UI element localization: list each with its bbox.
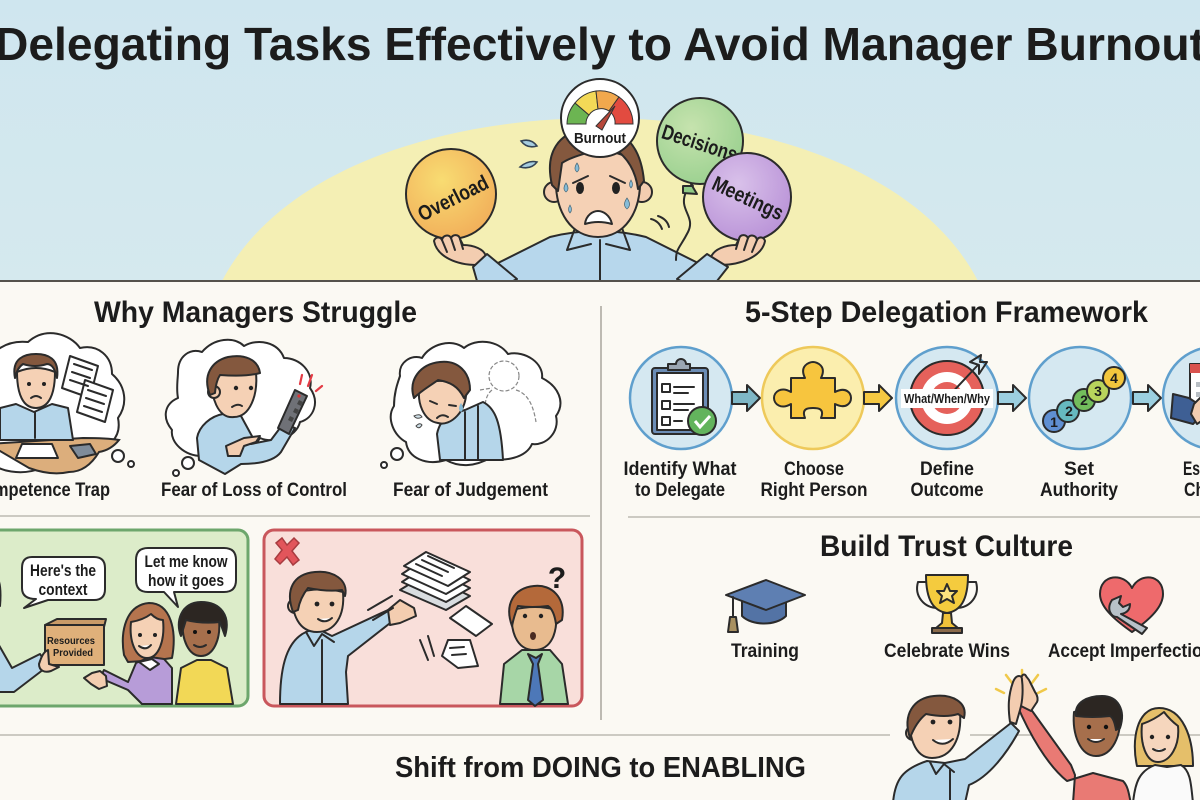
speech bubble: here's the context: [22, 557, 105, 608]
dumping manager: [280, 572, 416, 704]
icon: heart with wrench: [1100, 577, 1163, 634]
box: resources provided: Provided: [53, 647, 93, 659]
panel: good delegation example: [0, 530, 248, 706]
box: resources provided: Resources: [47, 635, 95, 647]
speech bubble: here's the context: Here's the: [30, 562, 96, 580]
icon: trophy: [917, 575, 977, 633]
question mark: ?: [548, 562, 566, 595]
burnout gauge: Burnout: [574, 130, 626, 147]
arrow: [732, 385, 760, 411]
step labels: Authority: [1040, 480, 1118, 501]
title: Delegating Tasks Effectively to Avoid Manager Burnout: [0, 18, 1200, 70]
speech bubble: let me know how it goes: [136, 548, 236, 607]
left hand: [434, 235, 486, 265]
stressed manager illustration: [406, 79, 791, 281]
speech bubble: let me know how it goes: Let me know: [144, 553, 228, 571]
step 4: set authority: 3: [1094, 383, 1102, 399]
step labels: Identify What: [624, 459, 737, 480]
icon: red x: [275, 538, 299, 565]
closing message: Shift from DOING to ENABLING: [395, 752, 806, 784]
step 4: set authority: 2: [1080, 392, 1088, 408]
step 3: define outcome: What/When/Why: [904, 391, 991, 406]
step labels: [624, 459, 1200, 501]
confused employee: [500, 586, 568, 706]
step 2: choose right person: [762, 347, 864, 449]
manager in blue: [893, 676, 1023, 800]
box: resources provided: [39, 619, 106, 672]
step labels: Set: [1064, 459, 1095, 480]
panel: bad delegation example: [264, 530, 582, 706]
panel: 5-step delegation framework: [624, 296, 1200, 501]
stack of papers: [368, 552, 492, 668]
manager head: [544, 128, 652, 237]
step 4: set authority: 2: [1065, 403, 1073, 419]
step labels: Right Person: [760, 480, 868, 501]
heading: 5-step delegation framework: 5-Step Delegation Framework: [745, 296, 1148, 329]
step 5: establish check-ins: [1163, 347, 1200, 449]
step labels: Choose: [784, 459, 844, 480]
woman in purple: [84, 603, 174, 704]
arrow: [1133, 385, 1161, 411]
motion marks: [651, 216, 669, 229]
speech bubble: let me know how it goes: how it goes: [148, 572, 224, 590]
sweat drops: [520, 140, 537, 168]
speech bubble: here's the context: context: [38, 581, 88, 599]
balloon: Overload: Overload: [414, 171, 492, 226]
heading: build trust culture: Build Trust Culture: [820, 530, 1073, 563]
balloon: Overload: [406, 149, 496, 239]
thought bubble: competence trap: [0, 333, 134, 473]
teammate in red: [1017, 674, 1131, 800]
label: celebrate wins: Celebrate Wins: [884, 641, 1010, 662]
step 4: set authority: 4: [1110, 370, 1118, 386]
thought bubble: fear of judgement: [381, 342, 560, 468]
label: fear of judgement: Fear of Judgement: [393, 480, 549, 501]
label: training: Training: [731, 641, 799, 662]
step labels: Define: [920, 459, 974, 480]
high-five illustration: [893, 670, 1193, 800]
woman in white: [1133, 708, 1193, 800]
step 1: identify what to delegate: [630, 347, 732, 449]
step labels: to Delegate: [635, 480, 725, 501]
right hand: [711, 235, 765, 265]
step 4: set authority: [1029, 347, 1131, 449]
panel: build trust culture: [726, 530, 1200, 662]
arrow: [998, 385, 1026, 411]
thought bubble: fear of loss of control: [166, 340, 322, 476]
balloon: Meetings: [703, 153, 791, 241]
icon: graduation cap: [726, 580, 805, 632]
background: sky: [0, 0, 1200, 282]
cream content panel: [0, 281, 1200, 800]
man in yellow: [176, 602, 233, 704]
manager arm and head: [0, 640, 48, 692]
arrow: [864, 385, 892, 411]
background: yellow sun hill: [222, 118, 978, 281]
step labels: Outcome: [910, 480, 984, 501]
balloon: Meetings: Meetings: [708, 172, 787, 225]
step 3: define outcome: [896, 347, 998, 449]
balloon: Decisions: Decisions: [659, 121, 740, 167]
sparkles: [996, 670, 1046, 693]
label: fear of loss of control: Fear of Loss of Control: [161, 480, 347, 501]
manager torso: [476, 231, 718, 281]
step 4: set authority: 1: [1050, 414, 1058, 430]
burnout gauge: [561, 79, 639, 157]
balloon: Decisions: [657, 98, 743, 260]
heading: why managers struggle: Why Managers Struggle: [94, 296, 417, 329]
panel: why managers struggle: [0, 296, 560, 501]
